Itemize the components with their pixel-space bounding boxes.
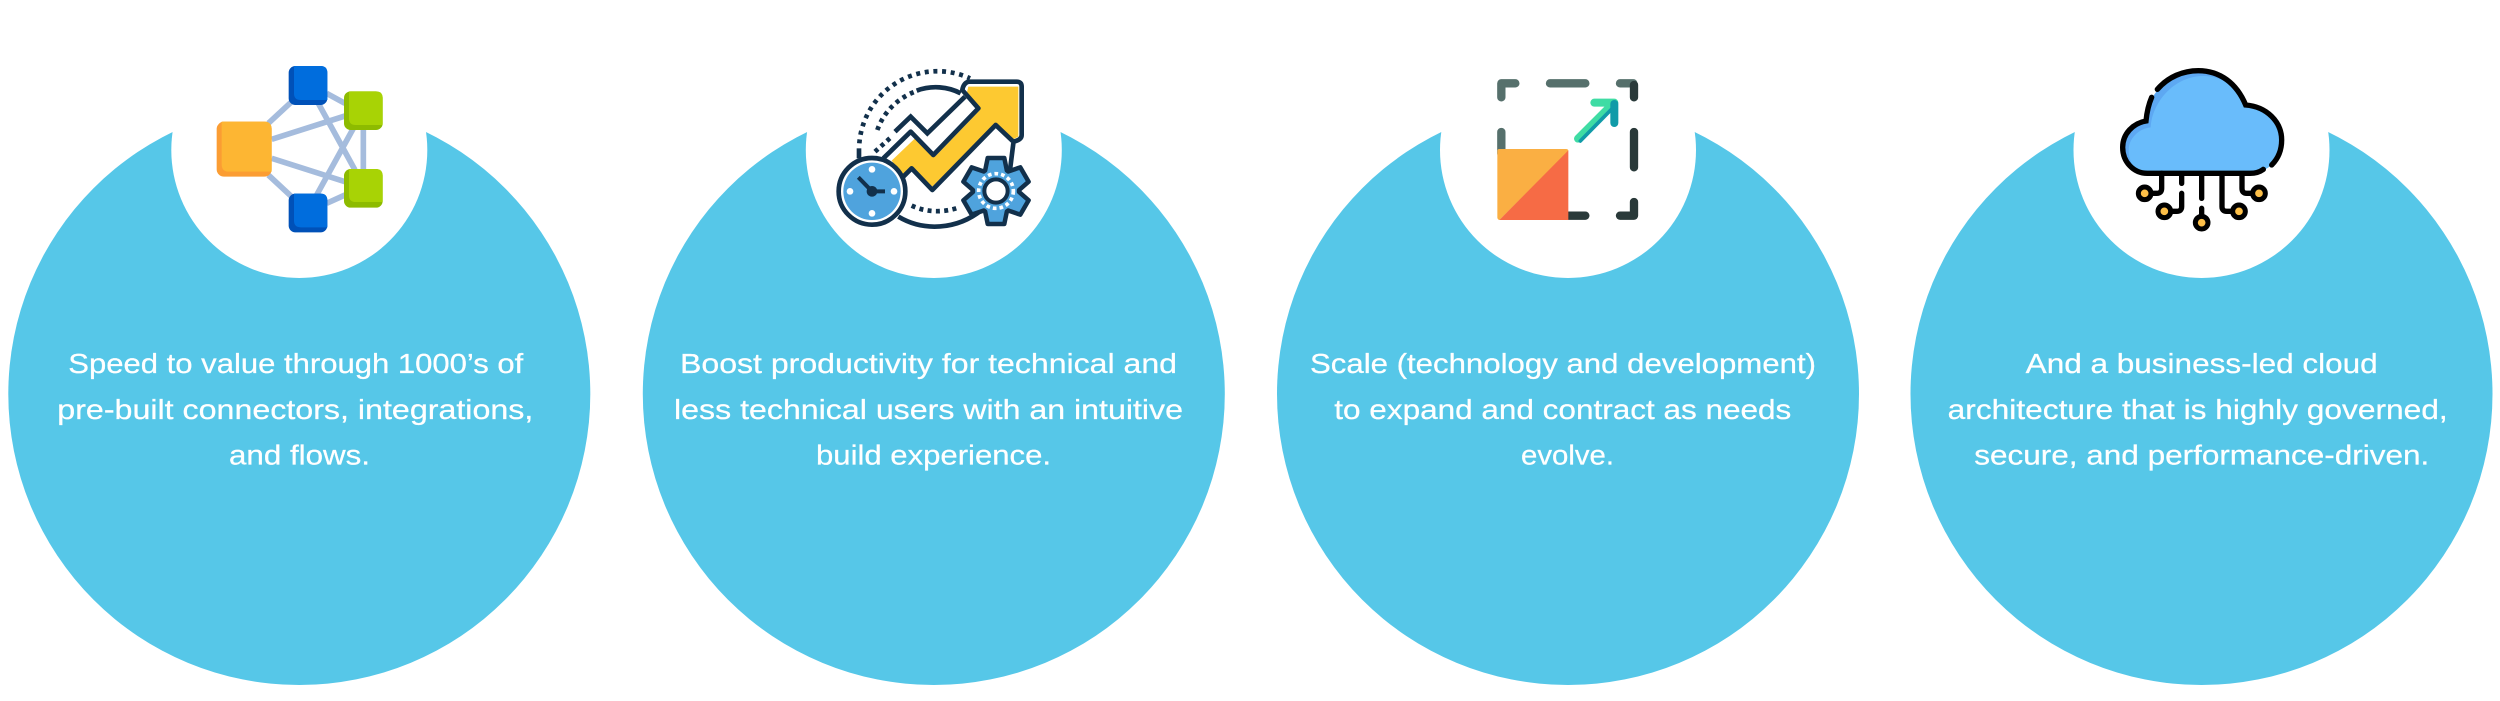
text: boost productivity: less technical users with an intuitive <box>674 394 1183 425</box>
icon backing circle <box>171 22 427 278</box>
panel: cloud architecture <box>1910 22 2492 685</box>
text: boost productivity: Boost productivity for technical and <box>680 348 1177 379</box>
icon backing circle <box>806 22 1062 278</box>
text: boost productivity: build experience. <box>816 440 1051 470</box>
text: scale: Scale (technology and development) <box>1310 348 1816 379</box>
text: scale: evolve. <box>1521 440 1614 470</box>
text: scale <box>1310 348 1816 470</box>
panel: scale <box>1277 22 1859 685</box>
text: cloud architecture <box>1948 348 2448 470</box>
text: boost productivity <box>674 348 1183 470</box>
panel background circle <box>643 103 1225 685</box>
icon: square expanding in dashed frame <box>1497 83 1634 220</box>
text: speed to value: and flows. <box>229 440 370 470</box>
panel background circle <box>8 103 590 685</box>
text: speed to value <box>57 348 533 470</box>
panel background circle <box>1910 103 2492 685</box>
icon: connected network nodes <box>217 66 383 232</box>
panel background circle <box>1277 103 1859 685</box>
text: speed to value: pre-built connectors, integrations, <box>57 394 533 425</box>
text: cloud architecture: secure, and performance-driven. <box>1974 440 2429 470</box>
panel: boost productivity <box>643 22 1225 685</box>
icon: clock, rising arrow and gear <box>839 71 1029 227</box>
icon backing circle <box>1440 22 1696 278</box>
panel: speed to value <box>8 22 590 685</box>
text: scale: to expand and contract as needs <box>1334 394 1791 425</box>
icon: cloud with circuit nodes <box>2123 71 2282 229</box>
text: cloud architecture: And a business-led cloud <box>2026 348 2378 379</box>
icon backing circle <box>2074 22 2330 278</box>
text: speed to value: Speed to value through 1000’s of <box>68 348 524 379</box>
text: cloud architecture: architecture that is highly governed, <box>1948 394 2448 425</box>
